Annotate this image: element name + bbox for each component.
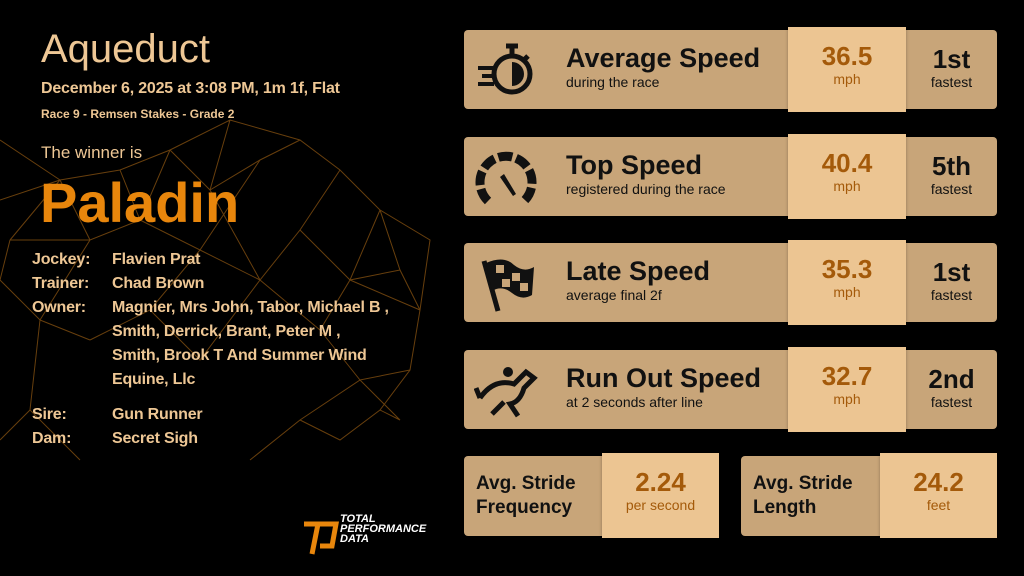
details: Dam: bbox=[32, 430, 71, 447]
card: average speed: Average Speed bbox=[566, 43, 760, 73]
details: Secret Sigh bbox=[112, 430, 198, 447]
icon: stopwatch bbox=[478, 44, 532, 94]
card: run out speed: mph bbox=[833, 391, 861, 407]
background network pattern bbox=[0, 120, 430, 460]
card: top speed: 5th bbox=[932, 151, 971, 181]
card: top speed: Top Speed bbox=[566, 150, 702, 180]
card: late speed: 35.3 bbox=[822, 254, 872, 284]
details: Smith, Brook T And Summer Wind bbox=[112, 347, 367, 364]
card: average speed: during the race bbox=[566, 74, 659, 90]
card: average speed: fastest bbox=[931, 74, 972, 90]
card: top speed: 40.4 bbox=[822, 148, 872, 178]
details: Chad Brown bbox=[112, 275, 204, 292]
details: Smith, Derrick, Brant, Peter M , bbox=[112, 323, 340, 340]
card: stride length: feet bbox=[927, 497, 950, 513]
logo bbox=[304, 513, 426, 554]
header: venue: Aqueduct bbox=[41, 27, 210, 71]
details: Owner: bbox=[32, 299, 86, 316]
logo: PERFORMANCE bbox=[340, 523, 426, 535]
card: top speed: fastest bbox=[931, 181, 972, 197]
card: stride length: Length bbox=[753, 497, 816, 518]
card: run out speed: 32.7 bbox=[822, 361, 872, 391]
card: stride frequency: per second bbox=[626, 497, 695, 513]
card: top speed bbox=[464, 137, 997, 216]
icon: horse and jockey bbox=[474, 367, 538, 418]
card: average speed bbox=[464, 30, 997, 109]
card: late speed bbox=[464, 243, 997, 322]
details: Gun Runner bbox=[112, 406, 202, 423]
details: Flavien Prat bbox=[112, 251, 200, 268]
card: stride frequency: 2.24 bbox=[635, 467, 686, 497]
card: stride frequency bbox=[464, 456, 719, 536]
card: run out speed: at 2 seconds after line bbox=[566, 394, 703, 410]
header: date: December 6, 2025 at 3:08 PM, 1m 1f, Flat bbox=[41, 80, 340, 97]
card: average speed: mph bbox=[833, 71, 861, 87]
card: top speed: mph bbox=[833, 178, 861, 194]
details: Jockey: bbox=[32, 251, 90, 268]
card: average speed: 1st bbox=[933, 44, 970, 74]
details bbox=[32, 251, 389, 447]
card: late speed: fastest bbox=[931, 287, 972, 303]
card: stride length: Avg. Stride bbox=[753, 473, 853, 494]
details: Equine, Llc bbox=[112, 371, 195, 388]
card: stride length bbox=[741, 456, 997, 536]
card: late speed: 1st bbox=[933, 257, 970, 287]
card: run out speed bbox=[464, 350, 997, 429]
card: run out speed: Run Out Speed bbox=[566, 363, 761, 393]
header: race: Race 9 - Remsen Stakes - Grade 2 bbox=[41, 107, 234, 121]
icon: checkered flag bbox=[482, 260, 534, 312]
card: late speed: average final 2f bbox=[566, 287, 662, 303]
details: Sire: bbox=[32, 406, 67, 423]
card: late speed: mph bbox=[833, 284, 861, 300]
card: average speed: 36.5 bbox=[822, 41, 872, 71]
winner name: Paladin bbox=[40, 171, 239, 234]
winner intro: The winner is bbox=[41, 143, 142, 162]
details: Trainer: bbox=[32, 275, 89, 292]
details: Magnier, Mrs John, Tabor, Michael B , bbox=[112, 299, 389, 316]
card: stride length: 24.2 bbox=[913, 467, 964, 497]
card: top speed: registered during the race bbox=[566, 181, 726, 197]
logo: TOTAL bbox=[340, 513, 376, 525]
card: late speed: Late Speed bbox=[566, 256, 710, 286]
logo: DATA bbox=[340, 533, 369, 545]
icon: speedometer bbox=[476, 152, 536, 204]
card: run out speed: 2nd bbox=[928, 364, 975, 394]
card: run out speed: fastest bbox=[931, 394, 972, 410]
card: stride frequency: Frequency bbox=[476, 497, 572, 518]
card: stride frequency: Avg. Stride bbox=[476, 473, 576, 494]
